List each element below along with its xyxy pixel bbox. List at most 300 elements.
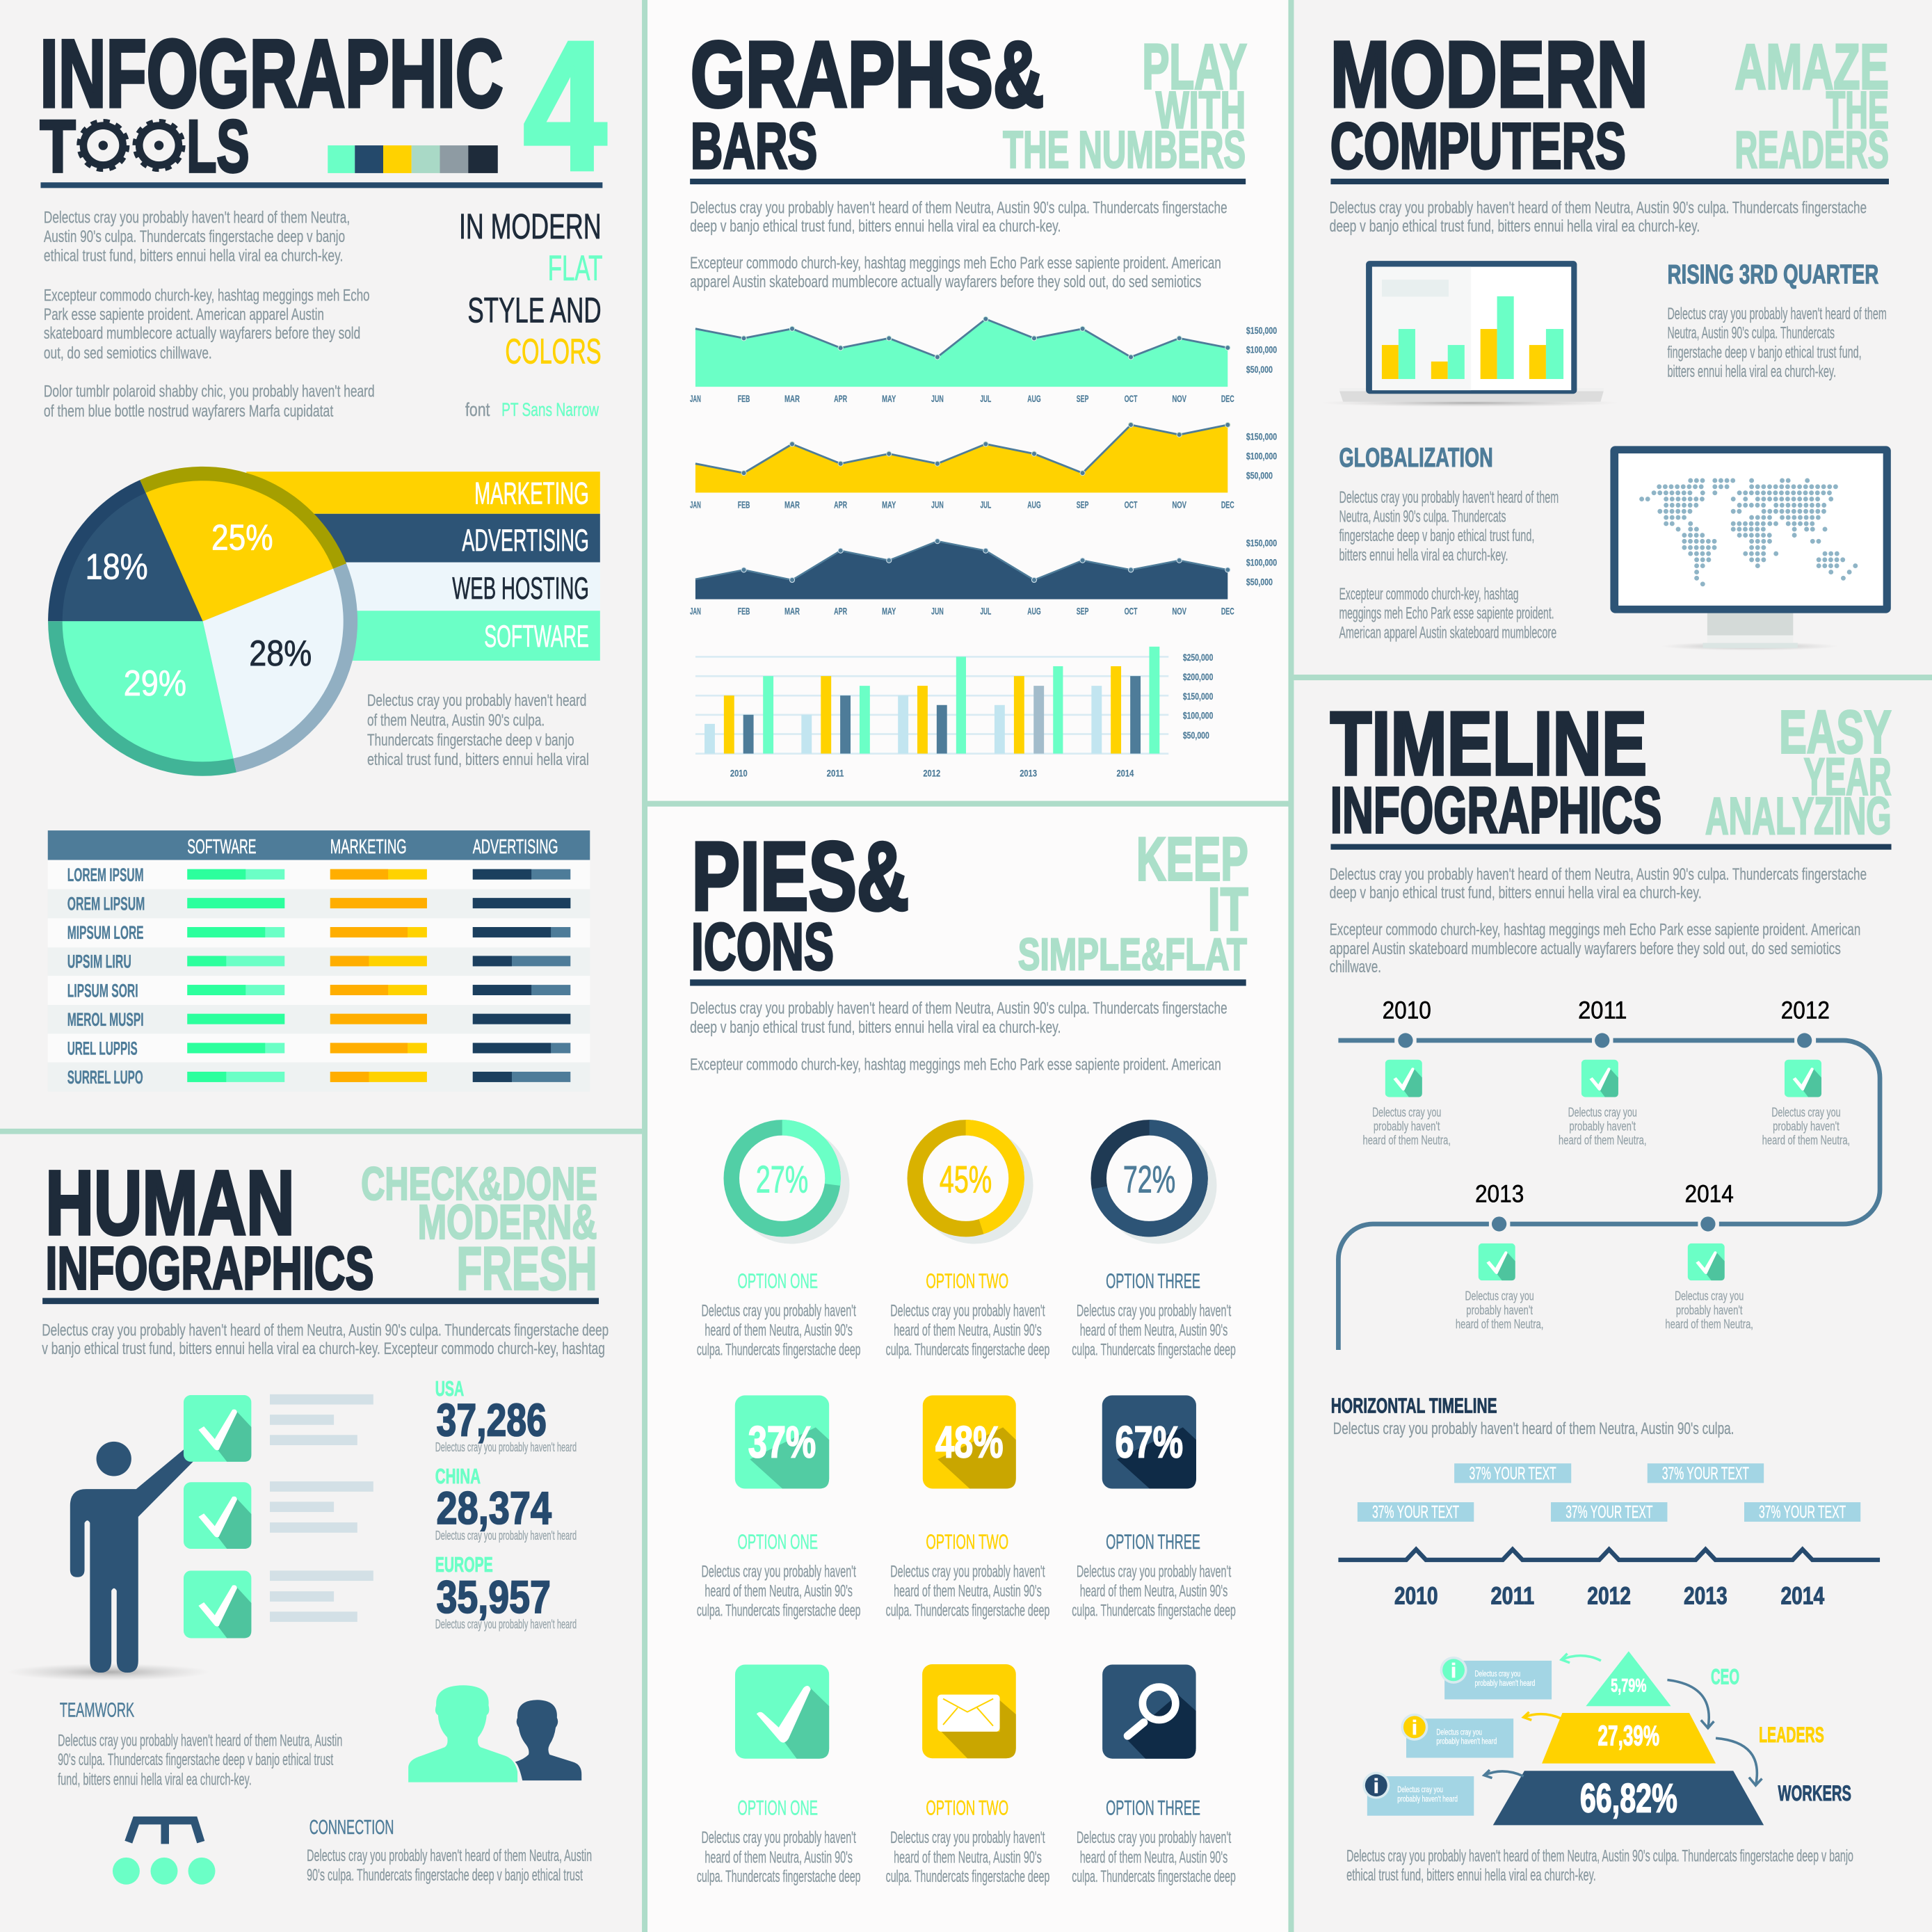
info box: workers: probably haven't heard — [1397, 1794, 1458, 1803]
horizontal timeline: 2010 — [1394, 1582, 1438, 1610]
pyramid chart: 5,79% — [1611, 1675, 1647, 1696]
options row 2: OPTION ONE — [738, 1531, 818, 1554]
globalization text: bitters ennui hella viral ea church-key. — [1339, 546, 1508, 565]
options row 1: OPTION TWO — [926, 1271, 1008, 1293]
pie chart: 29% — [124, 663, 186, 704]
options row 2: Delectus cray you probably haven't — [1077, 1562, 1231, 1581]
title: infographic tools: INFOGRAPHIC — [40, 20, 504, 127]
closing text: ethical trust fund, bitters ennui hella viral ea church-key. — [1346, 1866, 1596, 1885]
stat: China: 28,374 — [437, 1483, 552, 1533]
teamwork text — [58, 1700, 342, 1789]
stat: China: CHINA — [435, 1465, 481, 1488]
icon: magnifier tile — [1102, 1665, 1196, 1759]
options row 3: OPTION ONE — [738, 1798, 818, 1820]
panel: modern computers — [1319, 22, 1891, 650]
icon: gear letter O — [136, 122, 182, 169]
serpentine timeline: 2010 — [1383, 996, 1431, 1024]
icon: check tile — [735, 1665, 829, 1759]
area chart: navy: $50,000 — [1246, 577, 1273, 588]
info box: CEO: Delectus cray you — [1475, 1669, 1520, 1679]
globalization text: GLOBALIZATION — [1339, 443, 1493, 473]
teamwork text: Delectus cray you probably haven't heard of them Neutra, Austin — [58, 1731, 342, 1750]
heading — [691, 22, 1044, 182]
table: OREM LIPSUM — [67, 893, 145, 914]
options row 3: Delectus cray you probably haven't — [702, 1828, 856, 1847]
intro text — [44, 209, 375, 421]
info box: leaders: Delectus cray you — [1436, 1728, 1482, 1737]
intro text: deep v banjo ethical trust fund, bitters ennui hella viral ea church-key. — [690, 1018, 1061, 1037]
heading: ICONS — [691, 910, 834, 984]
intro text: skateboard mumblecore actually wayfarers before they sold — [44, 324, 360, 343]
options row 1: Delectus cray you probably haven't — [890, 1302, 1045, 1321]
pie chart: 28% — [249, 634, 312, 674]
options row 1: Delectus cray you probably haven't — [702, 1302, 856, 1321]
donut: 45%: 45% — [940, 1158, 992, 1201]
area chart: mint — [690, 316, 1277, 405]
subheading: CHECK&DONE — [361, 1159, 597, 1210]
heading — [45, 1152, 374, 1303]
arrows — [1484, 1654, 1762, 1785]
serpentine timeline: probably haven't — [1466, 1303, 1533, 1317]
area chart: yellow: OCT — [1125, 500, 1138, 511]
monitor with world map — [1610, 446, 1891, 650]
bar chart: $50,000 — [1183, 730, 1209, 741]
panel: timeline infographics — [1330, 694, 1892, 1885]
area chart: mint: JUN — [931, 394, 944, 405]
subheading — [1003, 31, 1247, 179]
horizontal timeline: 37% YOUR TEXT — [1469, 1465, 1556, 1483]
area chart: mint: NOV — [1172, 394, 1186, 405]
area chart: yellow: APR — [834, 500, 847, 511]
area chart: navy: DEC — [1221, 606, 1234, 617]
stat: Europe — [435, 1554, 577, 1631]
options row 2: culpa. Thundercats fingerstache deep — [697, 1602, 861, 1620]
area chart: yellow: JAN — [690, 500, 701, 511]
connection text: 90's culpa. Thundercats fingerstache deep v banjo ethical trust — [307, 1866, 583, 1885]
info box: workers: Delectus cray you — [1397, 1785, 1443, 1794]
area chart: yellow: FEB — [738, 500, 750, 511]
options row 2: Delectus cray you probably haven't — [890, 1562, 1045, 1581]
options row 2: culpa. Thundercats fingerstache deep — [1072, 1602, 1236, 1620]
area chart: yellow — [690, 422, 1277, 511]
serpentine timeline — [1338, 996, 1880, 1350]
area chart: mint: MAY — [882, 394, 896, 405]
table: MEROL MUSPI — [67, 1009, 144, 1030]
options row 2: OPTION THREE — [1106, 1531, 1200, 1554]
pie description: ethical trust fund, bitters ennui hella viral — [367, 750, 589, 769]
pyramid chart: 27,39% — [1598, 1720, 1659, 1752]
globalization text: fingerstache deep v banjo ethical trust fund, — [1339, 526, 1534, 545]
area chart: navy: SEP — [1077, 606, 1088, 617]
icon: envelope tile — [922, 1664, 1016, 1758]
options row 1: culpa. Thundercats fingerstache deep — [1072, 1341, 1236, 1360]
options row 2: Delectus cray you probably haven't — [702, 1562, 856, 1581]
options row 3: heard of them Neutra, Austin 90's — [705, 1848, 853, 1867]
area chart: navy: MAY — [882, 606, 896, 617]
intro text: Delectus cray you probably haven't heard of them Neutra, Austin 90's culpa. Thundercats fingerstache — [690, 199, 1227, 218]
tagline — [459, 206, 602, 420]
title: infographic tools: T — [40, 104, 76, 188]
area chart: navy: JUL — [980, 606, 992, 617]
intro text: ethical trust fund, bitters ennui hella viral ea church-key. — [44, 247, 343, 266]
serpentine timeline: probably haven't — [1773, 1119, 1840, 1134]
intro text: Delectus cray you probably haven't heard of them Neutra, — [44, 209, 350, 227]
tile: 37%: 37% — [748, 1417, 816, 1467]
options row 2: heard of them Neutra, Austin 90's — [894, 1582, 1042, 1601]
bar chart: $150,000 — [1183, 691, 1213, 702]
stat: USA: 37,286 — [437, 1394, 547, 1445]
serpentine timeline: 2011 — [1578, 996, 1627, 1024]
donut: 45% — [907, 1120, 1033, 1244]
area chart: yellow: JUN — [931, 500, 944, 511]
panel: infographic tools — [40, 4, 607, 1092]
options row 2: OPTION TWO — [926, 1531, 1008, 1554]
checklist — [184, 1394, 373, 1638]
big number 4: 4 — [524, 4, 607, 208]
serpentine timeline: probably haven't — [1676, 1303, 1743, 1317]
globalization text: American apparel Austin skateboard mumblecore — [1339, 624, 1556, 643]
subheading: KEEP — [1136, 825, 1248, 894]
area chart: yellow: MAY — [882, 500, 896, 511]
info box: leaders — [1401, 1714, 1513, 1757]
globalization text — [1339, 443, 1559, 643]
tile: 37% — [735, 1395, 829, 1489]
heading: PIES& — [691, 821, 909, 931]
area chart: mint: APR — [834, 394, 847, 405]
area chart: mint: OCT — [1125, 394, 1138, 405]
options row 1: OPTION THREE — [1106, 1271, 1200, 1293]
teamwork text: TEAMWORK — [60, 1700, 134, 1722]
subheading: IT — [1208, 876, 1248, 943]
closing text — [1346, 1846, 1853, 1885]
stat: Europe: EUROPE — [435, 1554, 493, 1577]
horizontal timeline: 37% YOUR TEXT — [1565, 1504, 1652, 1522]
table: SURREL LUPO — [67, 1067, 143, 1088]
table: MARKETING — [330, 836, 407, 858]
info box: CEO: i — [1451, 1660, 1456, 1682]
donut: 72%: 72% — [1123, 1158, 1175, 1201]
area chart: yellow: $50,000 — [1246, 470, 1273, 481]
bar chart: 2012 — [923, 768, 940, 780]
heading: COMPUTERS — [1330, 109, 1626, 182]
area chart: navy: $100,000 — [1246, 558, 1277, 569]
options row 2: culpa. Thundercats fingerstache deep — [886, 1602, 1049, 1620]
area chart: mint: JAN — [690, 394, 701, 405]
heading: INFOGRAPHICS — [1330, 773, 1661, 846]
area chart: navy: AUG — [1027, 606, 1041, 617]
serpentine timeline: heard of them Neutra, — [1559, 1133, 1647, 1148]
options row 2: heard of them Neutra, Austin 90's — [705, 1582, 853, 1601]
subheading: THE — [1826, 81, 1889, 139]
options row 1: culpa. Thundercats fingerstache deep — [886, 1341, 1049, 1360]
horizontal timeline: 37% YOUR TEXT — [1372, 1504, 1459, 1522]
options row 1: OPTION ONE — [738, 1271, 818, 1293]
subheading — [1705, 698, 1892, 845]
pie chart: 25% — [211, 518, 273, 558]
horizontal timeline heading: Delectus cray you probably haven't heard of them Neutra, Austin 90's culpa. — [1333, 1419, 1734, 1438]
horizontal timeline: 37% YOUR TEXT — [1759, 1504, 1846, 1522]
intro text — [690, 999, 1227, 1074]
panel: graphs and bars — [690, 22, 1277, 780]
area chart: mint: $150,000 — [1246, 325, 1277, 337]
area chart: yellow: SEP — [1077, 500, 1088, 511]
serpentine timeline: probably haven't — [1569, 1119, 1636, 1134]
options row 3: heard of them Neutra, Austin 90's — [894, 1848, 1042, 1867]
area chart: mint: AUG — [1027, 394, 1041, 405]
options row 1: heard of them Neutra, Austin 90's — [705, 1321, 853, 1340]
horizontal timeline: 37% YOUR TEXT — [1662, 1465, 1749, 1483]
intro text: Delectus cray you probably haven't heard of them Neutra, Austin 90's culpa. Thundercats fingerstache deep — [42, 1321, 609, 1340]
globalization text: Neutra, Austin 90's culpa. Thundercats — [1339, 507, 1506, 526]
options row 3: heard of them Neutra, Austin 90's — [1080, 1848, 1227, 1867]
info box: CEO: probably haven't heard — [1475, 1678, 1535, 1688]
heading: BARS — [691, 109, 817, 182]
intro text: v banjo ethical trust fund, bitters ennui hella viral ea church-key. Excepteur commodo church-key, hashtag — [42, 1339, 605, 1358]
info box: CEO — [1440, 1657, 1552, 1700]
pie description — [367, 691, 589, 769]
area chart: navy: JAN — [690, 606, 701, 617]
options row 1 — [697, 1271, 1236, 1360]
intro text: out, do sed semiotics chillwave. — [44, 344, 212, 363]
horizontal timeline heading: HORIZONTAL TIMELINE — [1331, 1395, 1497, 1418]
area chart: yellow: AUG — [1027, 500, 1041, 511]
options row 3: Delectus cray you probably haven't — [1077, 1828, 1231, 1847]
pyramid chart — [1493, 1651, 1851, 1825]
subheading: WITH — [1156, 81, 1246, 139]
table: SOFTWARE — [187, 836, 257, 858]
serpentine timeline: Delectus cray you — [1372, 1104, 1441, 1119]
stat: Europe: Delectus cray you probably haven't heard — [435, 1616, 577, 1631]
intro text: Dolor tumblr polaroid shabby chic, you probably haven't heard — [44, 382, 375, 401]
bar chart: $200,000 — [1183, 672, 1213, 683]
options row 3: OPTION THREE — [1106, 1798, 1200, 1820]
tagline: IN MODERN — [459, 206, 602, 246]
stat: Europe: 35,957 — [437, 1572, 551, 1623]
area chart: yellow: DEC — [1221, 500, 1234, 511]
area chart: navy: JUN — [931, 606, 944, 617]
subheading: PLAY — [1142, 31, 1247, 102]
info box: workers: i — [1374, 1776, 1379, 1798]
globalization text: Delectus cray you probably haven't heard of them — [1339, 488, 1559, 507]
icon: gear letter O — [80, 122, 127, 169]
area chart: yellow: MAR — [784, 500, 800, 511]
info box: leaders: i — [1412, 1717, 1417, 1739]
bar chart: 2013 — [1020, 768, 1037, 780]
serpentine timeline: probably haven't — [1374, 1119, 1440, 1134]
tile: 48%: 48% — [935, 1417, 1004, 1467]
horizontal timeline: 2013 — [1684, 1582, 1728, 1610]
category bars: WEB HOSTING — [452, 572, 589, 606]
pie description: Delectus cray you probably haven't heard — [367, 691, 586, 710]
options row 2: heard of them Neutra, Austin 90's — [1080, 1582, 1227, 1601]
options row 1: Delectus cray you probably haven't — [1077, 1302, 1231, 1321]
connection text: CONNECTION — [309, 1817, 394, 1839]
area chart: navy: APR — [834, 606, 847, 617]
intro text: Austin 90's culpa. Thundercats fingerstache deep v banjo — [44, 227, 345, 246]
intro text — [42, 1321, 609, 1358]
area chart: mint: $100,000 — [1246, 345, 1277, 356]
table: UPSIM LIRU — [67, 951, 131, 972]
horizontal timeline: 2012 — [1587, 1582, 1631, 1610]
area chart: mint: DEC — [1221, 394, 1234, 405]
panel: human infographics — [8, 1152, 609, 1885]
pyramid chart: LEADERS — [1759, 1722, 1824, 1747]
subheading: FRESH — [457, 1235, 597, 1303]
options row 3: OPTION TWO — [926, 1798, 1008, 1820]
info box: workers — [1362, 1772, 1474, 1816]
intro text: Excepteur commodo church-key, hashtag meggings meh Echo — [44, 286, 370, 305]
title: infographic tools — [40, 20, 504, 188]
tagline: STYLE AND — [467, 289, 602, 330]
options row 2 — [697, 1531, 1236, 1620]
area chart: mint: JUL — [980, 394, 992, 405]
area chart: mint: FEB — [738, 394, 750, 405]
intro text: deep v banjo ethical trust fund, bitters ennui hella viral ea church-key. — [690, 217, 1061, 236]
icon: connection — [113, 1821, 216, 1885]
heading: HUMAN — [45, 1152, 295, 1254]
serpentine timeline: heard of them Neutra, — [1665, 1317, 1753, 1331]
area chart: navy: OCT — [1125, 606, 1138, 617]
bar chart: $100,000 — [1183, 711, 1213, 722]
category bars: MARKETING — [474, 477, 589, 511]
intro text: Excepteur commodo church-key, hashtag meggings meh Echo Park esse sapiente proident. American — [690, 254, 1221, 273]
icon: people — [408, 1685, 581, 1782]
table: LIPSUM SORI — [67, 980, 138, 1001]
tile: 48% — [923, 1395, 1016, 1489]
connection text: Delectus cray you probably haven't heard of them Neutra, Austin — [307, 1846, 592, 1865]
tile: 67%: 67% — [1116, 1417, 1183, 1467]
options row 3: Delectus cray you probably haven't — [890, 1828, 1045, 1847]
heading — [1330, 22, 1648, 182]
intro text: deep v banjo ethical trust fund, bitters ennui hella viral ea church-key. — [1330, 884, 1702, 903]
bar chart: 2014 — [1116, 768, 1134, 780]
subheading — [361, 1159, 597, 1303]
intro text: Excepteur commodo church-key, hashtag meggings meh Echo Park esse sapiente proident. American — [690, 1055, 1221, 1074]
heading — [691, 821, 909, 984]
colour swatches — [328, 145, 498, 173]
subheading: SIMPLE&FLAT — [1018, 929, 1247, 980]
serpentine timeline: heard of them Neutra, — [1456, 1317, 1543, 1331]
tagline: PT Sans Narrow — [501, 399, 599, 420]
horizontal timeline: 2011 — [1491, 1582, 1534, 1610]
intro text: Park esse sapiente proident. American apparel Austin — [44, 305, 324, 324]
serpentine timeline: 2014 — [1685, 1180, 1734, 1207]
serpentine timeline: Delectus cray you — [1568, 1104, 1637, 1119]
icon: person pointing — [8, 1442, 209, 1681]
heading: TIMELINE — [1330, 694, 1647, 794]
subheading — [1018, 825, 1248, 980]
horizontal timeline — [1338, 1463, 1880, 1610]
bar chart — [695, 647, 1213, 780]
options row 3: culpa. Thundercats fingerstache deep — [697, 1867, 861, 1886]
laptop with bar chart — [1319, 261, 1620, 407]
area chart: navy — [690, 538, 1277, 617]
world map dots — [1642, 481, 1855, 584]
serpentine timeline: 2012 — [1781, 996, 1830, 1024]
intro text — [1330, 199, 1867, 236]
stat: USA — [435, 1378, 577, 1454]
pie chart — [48, 467, 357, 776]
tagline: FLAT — [548, 248, 602, 288]
stat: USA: USA — [435, 1378, 464, 1401]
globalization text: Excepteur commodo church-key, hashtag — [1339, 585, 1519, 604]
category bars — [246, 472, 600, 661]
options row 1: heard of them Neutra, Austin 90's — [894, 1321, 1042, 1340]
tagline: font — [465, 399, 490, 420]
stat: USA: Delectus cray you probably haven't heard — [435, 1440, 577, 1454]
table: UREL LUPPIS — [67, 1038, 138, 1059]
options row 1: heard of them Neutra, Austin 90's — [1080, 1321, 1227, 1340]
pie chart: 18% — [86, 547, 148, 588]
panel: pies and icons — [690, 821, 1248, 1886]
serpentine timeline: heard of them Neutra, — [1362, 1133, 1451, 1148]
table: MIPSUM LORE — [67, 922, 144, 943]
area chart: mint: SEP — [1077, 394, 1088, 405]
serpentine timeline: Delectus cray you — [1675, 1289, 1744, 1303]
pie description: Thundercats fingerstache deep v banjo — [367, 731, 574, 750]
pyramid chart: 66,82% — [1580, 1776, 1677, 1821]
options row 1: culpa. Thundercats fingerstache deep — [697, 1341, 861, 1360]
options row 3 — [697, 1798, 1236, 1886]
stat: China — [435, 1465, 577, 1543]
info box: leaders: probably haven't heard — [1436, 1737, 1497, 1746]
area chart: yellow: $150,000 — [1246, 432, 1277, 443]
horizontal timeline heading — [1331, 1395, 1734, 1438]
heading: GRAPHS& — [691, 22, 1044, 127]
intro text: deep v banjo ethical trust fund, bitters ennui hella viral ea church-key. — [1330, 217, 1700, 236]
title: infographic tools: LS — [186, 104, 250, 188]
serpentine timeline: Delectus cray you — [1771, 1104, 1841, 1119]
donut: 27%: 27% — [756, 1158, 808, 1201]
connection text — [307, 1817, 592, 1885]
intro text: of them blue bottle nostrud wayfarers Marfa cupidatat — [44, 402, 333, 421]
category bars: SOFTWARE — [484, 620, 589, 654]
serpentine timeline: heard of them Neutra, — [1762, 1133, 1850, 1148]
heading: INFOGRAPHICS — [45, 1235, 374, 1303]
intro text: apparel Austin skateboard mumblecore actually wayfarers before they sold out, do sed semiotics — [690, 273, 1201, 291]
area chart: navy: FEB — [738, 606, 750, 617]
pyramid chart: CEO — [1711, 1664, 1739, 1689]
pyramid chart: WORKERS — [1778, 1780, 1851, 1805]
intro text — [1330, 865, 1867, 976]
area chart: navy: $150,000 — [1246, 538, 1277, 549]
area chart: mint: MAR — [784, 394, 800, 405]
table: LOREM IPSUM — [67, 864, 144, 885]
area chart: yellow: $100,000 — [1246, 451, 1277, 462]
heading — [1330, 694, 1661, 846]
teamwork text: fund, bitters ennui hella viral ea church-key. — [58, 1770, 252, 1789]
serpentine timeline: Delectus cray you — [1465, 1289, 1534, 1303]
intro text: chillwave. — [1330, 958, 1381, 976]
tagline: COLORS — [505, 331, 602, 371]
donut: 27% — [724, 1120, 850, 1244]
intro text: Delectus cray you probably haven't heard of them Neutra, Austin 90's culpa. Thundercats fingerstache — [690, 999, 1227, 1018]
rising 3rd quarter text — [1667, 259, 1887, 381]
stat: China: Delectus cray you probably haven't heard — [435, 1528, 577, 1543]
globalization text: meggings meh Echo Park esse sapiente proident. — [1339, 604, 1554, 622]
area chart: navy: NOV — [1172, 606, 1186, 617]
pie description: of them Neutra, Austin 90's culpa. — [367, 711, 545, 730]
tile: 67% — [1102, 1395, 1196, 1489]
options row 3: culpa. Thundercats fingerstache deep — [886, 1867, 1049, 1886]
table: ADVERTISING — [473, 836, 558, 858]
teamwork text: 90's culpa. Thundercats fingerstache deep v banjo ethical trust — [58, 1750, 333, 1769]
donut: 72% — [1090, 1120, 1217, 1244]
area chart: mint: $50,000 — [1246, 364, 1273, 376]
table — [48, 830, 590, 1092]
bar chart: 2011 — [827, 768, 844, 780]
bar chart: 2010 — [730, 768, 748, 780]
